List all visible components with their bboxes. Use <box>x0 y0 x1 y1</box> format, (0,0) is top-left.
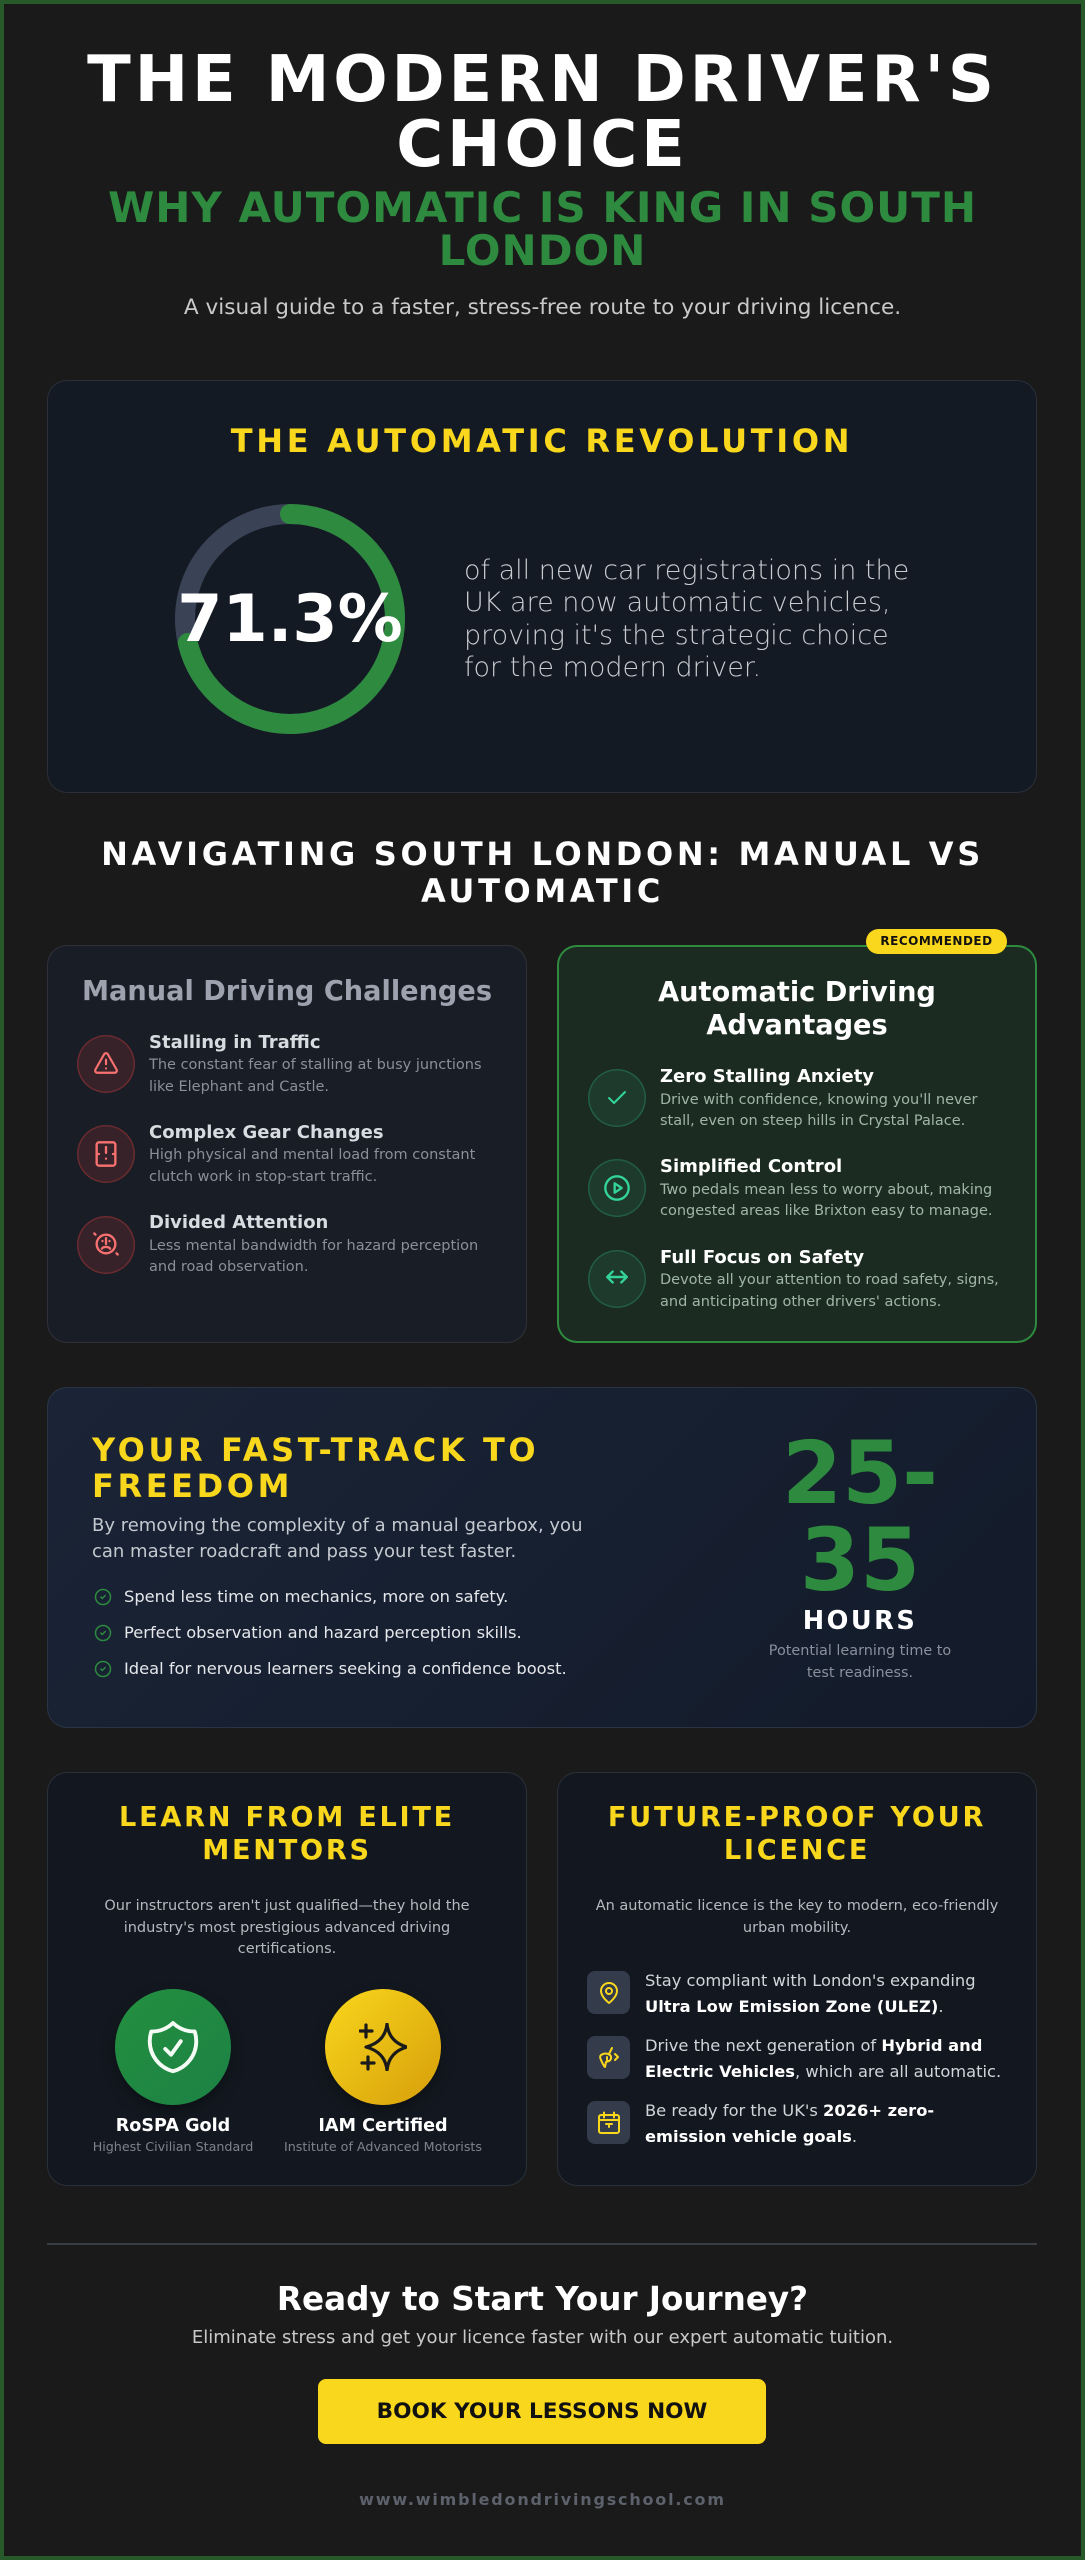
stat: 25-35 hours: Potential learning time to <box>769 1643 951 1659</box>
item: zero stalling anxiety: Drive with confidence, knowing you'll never <box>660 1092 977 1108</box>
stat: 25-35 hours: 25- <box>782 1424 938 1524</box>
heading: future-proof your licence <box>608 1802 986 1866</box>
icon: sparkles <box>325 1989 441 2105</box>
heading: future-proof your licence: LICENCE <box>724 1834 870 1866</box>
badge: IAM Certified <box>284 1989 482 2154</box>
list item: observation: Perfect observation and hazard perception skills. <box>124 1623 522 1642</box>
icon: shield check <box>115 1989 231 2105</box>
item: zero stalling anxiety: stall, even on steep hills in Crystal Palace. <box>660 1113 965 1129</box>
text: instructors description: certifications. <box>238 1941 336 1957</box>
text: registrations statistic <box>464 554 909 683</box>
heading: manual vs automatic: NAVIGATING SOUTH LONDON: MANUAL VS <box>101 835 984 873</box>
icon: distracted face <box>77 1216 135 1274</box>
item: divided attention: Divided Attention <box>149 1212 328 1233</box>
heading: learn from elite mentors <box>119 1802 455 1866</box>
donut chart: 71.3%: 71.3% <box>177 582 403 657</box>
stat: 25-35 hours <box>769 1424 951 1681</box>
heading: ready to start: Ready to Start Your Journey? <box>277 2280 808 2318</box>
heading: manual vs automatic: AUTOMATIC <box>421 872 664 910</box>
item: hybrid and electric: Electric Vehicles, which are all automatic. <box>645 2062 1001 2081</box>
item: simplified control: Two pedals mean less to worry about, making <box>660 1182 992 1198</box>
heading: future-proof your licence: FUTURE-PROOF YOUR <box>608 1802 986 1832</box>
text: call to action description: Eliminate stress and get your licence faster with our expert automatic tuition. <box>192 2327 893 2348</box>
item: stalling in traffic: Stalling in Traffic <box>149 1032 321 1052</box>
heading: manual vs automatic <box>101 835 984 910</box>
icon: calendar <box>587 2101 630 2144</box>
icon: warning triangle <box>77 1035 135 1093</box>
item: full focus on safety: and anticipating other drivers' actions. <box>660 1294 941 1310</box>
text: fast-track description: By removing the complexity of a manual gearbox, you <box>92 1515 582 1536</box>
item: simplified control: congested areas like Brixton easy to manage. <box>660 1203 993 1219</box>
heading: your fast-track to freedom: YOUR FAST-TRACK TO <box>92 1431 539 1469</box>
panel: future-proof your licence <box>557 1772 1037 2186</box>
icon: play circle <box>588 1159 646 1217</box>
item: ULEZ <box>587 1971 976 2016</box>
item: full focus on safety: Full Focus on Safety <box>660 1247 864 1268</box>
text: licence description: urban mobility. <box>743 1920 851 1936</box>
stat: 25-35 hours: HOURS <box>803 1606 917 1636</box>
icon: gear alert <box>77 1125 135 1183</box>
item: simplified control <box>588 1156 993 1219</box>
icon: check <box>588 1069 646 1127</box>
list item: nervous learners: Ideal for nervous learners seeking a confidence boost. <box>124 1659 567 1678</box>
badge: RoSPA Gold <box>93 1989 253 2154</box>
text: registrations statistic: of all new car registrations in the <box>464 554 909 586</box>
badge: recommended: RECOMMENDED <box>880 934 993 948</box>
item: zero stalling anxiety: Zero Stalling Anxiety <box>660 1066 874 1087</box>
list item: mechanics: Spend less time on mechanics, more on safety. <box>124 1587 508 1606</box>
item: hybrid and electric: Drive the next generation of Hybrid and <box>645 2036 982 2055</box>
stat: 25-35 hours: test readiness. <box>807 1665 913 1681</box>
text: fast-track description <box>92 1515 582 1562</box>
item: stalling in traffic: The constant fear of stalling at busy junctions <box>149 1057 482 1073</box>
panel: automatic revolution <box>47 380 1037 793</box>
item: divided attention: and road observation. <box>149 1259 308 1275</box>
icon: left-right arrows <box>588 1250 646 1308</box>
icon: location pin <box>587 1971 630 2014</box>
badge: IAM Certified: IAM Certified <box>318 2116 448 2136</box>
heading: learn from elite mentors: LEARN FROM ELITE <box>119 1802 455 1832</box>
item: full focus on safety: Devote all your attention to road safety, signs, <box>660 1272 999 1288</box>
tagline: A visual guide to a faster, stress-free route to your driving licence. <box>184 295 901 320</box>
badge: RoSPA Gold: Highest Civilian Standard <box>93 2139 253 2154</box>
item: zero-emission goals: Be ready for the UK's 2026+ zero- <box>645 2101 934 2120</box>
stat: 25-35 hours: 35 <box>800 1511 920 1611</box>
text: instructors description: industry's most prestigious advanced driving <box>124 1920 450 1936</box>
item: stalling in traffic <box>77 1032 482 1095</box>
donut chart: 71.3% <box>175 504 405 734</box>
button: book your lessons now: BOOK YOUR LESSONS NOW <box>377 2399 707 2424</box>
title <box>87 42 998 182</box>
text: licence description <box>596 1898 998 1936</box>
badge: RoSPA Gold: RoSPA Gold <box>116 2116 230 2136</box>
icon: electric plug <box>587 2036 630 2079</box>
item: divided attention <box>77 1212 478 1275</box>
item: zero-emission goals: emission vehicle goals. <box>645 2127 857 2146</box>
item: complex gear changes <box>77 1122 475 1185</box>
heading: the automatic revolution: THE AUTOMATIC REVOLUTION <box>231 422 853 460</box>
item: stalling in traffic: like Elephant and Castle. <box>149 1079 329 1095</box>
title: CHOICE <box>396 108 689 182</box>
subtitle: LONDON <box>439 226 646 274</box>
footer: website: www.wimbledondrivingschool.com <box>359 2490 726 2509</box>
item: zero-emission goals <box>587 2101 934 2146</box>
panel: automatic driving advantages <box>557 945 1037 1343</box>
item: complex gear changes: High physical and mental load from constant <box>149 1147 475 1163</box>
heading: manual driving challenges: Manual Driving Challenges <box>82 976 492 1007</box>
subtitle: WHY AUTOMATIC IS KING IN SOUTH <box>108 182 977 232</box>
text: registrations statistic: UK are now automatic vehicles, <box>464 587 891 618</box>
badge: IAM Certified: Institute of Advanced Motorists <box>284 2139 482 2154</box>
panel: fast-track to freedom <box>47 1387 1037 1728</box>
panel: learn from elite mentors <box>47 1772 527 2186</box>
item: full focus on safety <box>588 1247 999 1310</box>
item: complex gear changes: clutch work in stop-start traffic. <box>149 1169 377 1185</box>
heading: your fast-track to freedom <box>92 1431 539 1505</box>
text: licence description: An automatic licence is the key to modern, eco-friendly <box>596 1898 998 1914</box>
heading: your fast-track to freedom: FREEDOM <box>92 1467 293 1505</box>
item: ULEZ: Ultra Low Emission Zone (ULEZ). <box>645 1997 944 2016</box>
heading: automatic driving advantages: Advantages <box>706 1010 888 1041</box>
badge: recommended <box>866 929 1007 954</box>
item: zero stalling anxiety <box>588 1066 978 1129</box>
text: instructors description: Our instructors aren't just qualified—they hold the <box>104 1898 470 1914</box>
text: registrations statistic: for the modern driver. <box>464 652 761 683</box>
text: fast-track description: can master roadcraft and pass your test faster. <box>92 1541 516 1562</box>
text: registrations statistic: proving it's the strategic choice <box>464 620 889 651</box>
item: complex gear changes: Complex Gear Changes <box>149 1122 384 1143</box>
heading: automatic driving advantages <box>658 976 936 1041</box>
text: instructors description <box>104 1898 470 1957</box>
item: simplified control: Simplified Control <box>660 1156 842 1177</box>
title: THE MODERN DRIVER'S <box>87 42 998 116</box>
subtitle <box>108 182 977 274</box>
item: divided attention: Less mental bandwidth for hazard perception <box>149 1238 478 1254</box>
panel: manual driving challenges <box>47 945 527 1343</box>
button: book your lessons now <box>318 2379 766 2444</box>
item: ULEZ: Stay compliant with London's expanding <box>645 1971 976 1990</box>
heading: automatic driving advantages: Automatic Driving <box>658 976 936 1008</box>
item: hybrid and electric <box>587 2036 1001 2081</box>
heading: learn from elite mentors: MENTORS <box>202 1834 372 1866</box>
